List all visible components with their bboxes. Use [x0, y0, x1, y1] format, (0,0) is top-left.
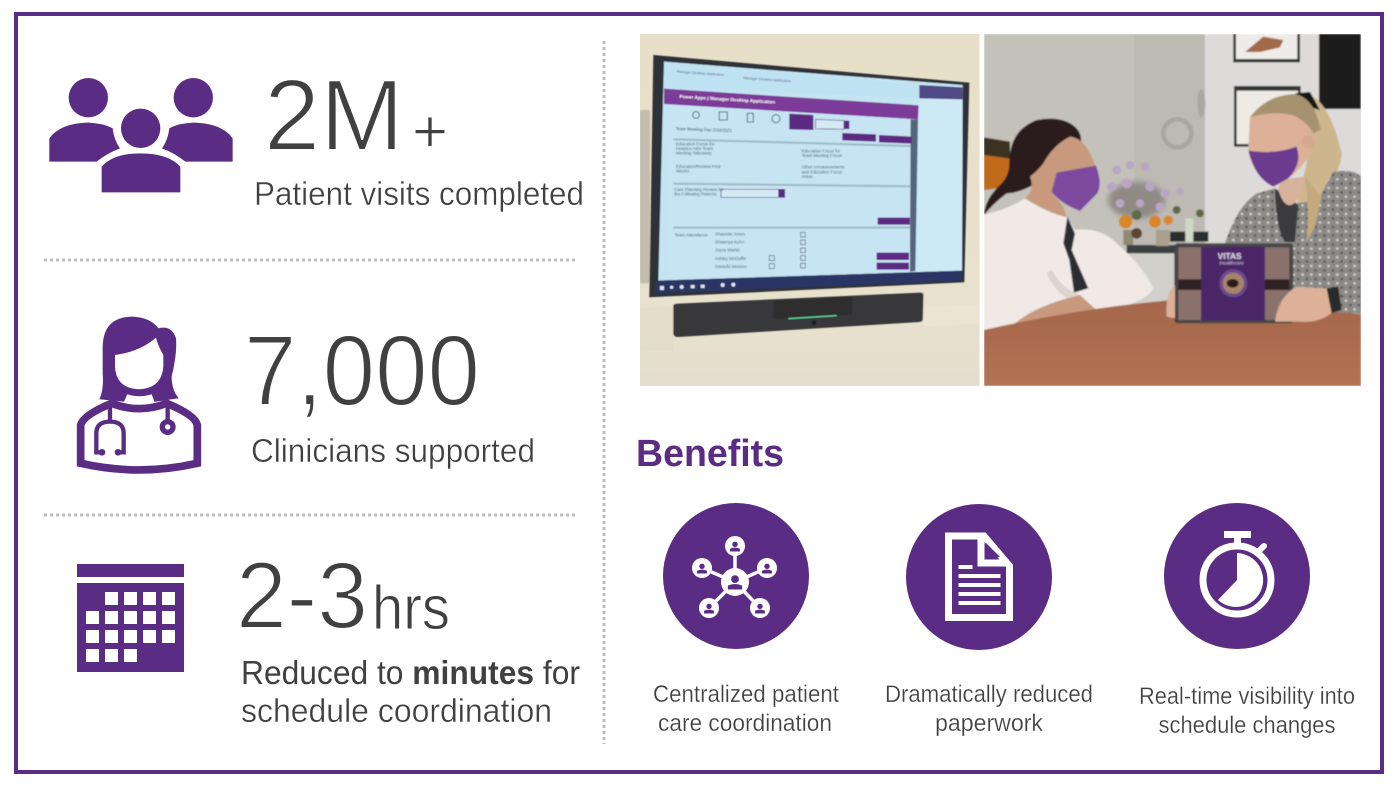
- monitor screen: [658, 62, 963, 281]
- right woman: head: [1248, 111, 1311, 187]
- nav icons: [693, 112, 780, 123]
- benefit: care coordination: [653, 503, 839, 737]
- photo: wall-mounted display showing the schedule app: Manager Desktop Application: [743, 76, 791, 83]
- horizontal dotted divider: [44, 258, 575, 262]
- picture frames: [1233, 34, 1300, 62]
- form labels: and Education Focus: [802, 169, 842, 174]
- caption: schedule changes: [1158, 712, 1336, 739]
- caption: paperwork: [935, 710, 1044, 737]
- form labels: Danielle Moreno: [715, 264, 747, 269]
- photo: wall-mounted display showing the schedule app: Power Apps | Manager Desktop Application: [679, 94, 775, 105]
- heading: Benefits: Benefits: [636, 433, 784, 475]
- action buttons: [842, 133, 876, 142]
- caption: Real-time visibility into: [1139, 683, 1355, 710]
- form labels: Shawnya Kuhn: [715, 239, 745, 244]
- stat: clinicians: [81, 315, 535, 470]
- form labels: Weeks: [676, 169, 689, 174]
- form labels: Team Meeting Day 2/10/2021: [675, 126, 733, 133]
- form labels: Ashley McDuffie: [715, 256, 747, 261]
- taskbar: [655, 271, 962, 293]
- left woman: ponytail and hair: [984, 119, 1081, 215]
- nav selected tile: [789, 114, 813, 130]
- icon: network of people: [663, 503, 809, 649]
- checkboxes: [769, 232, 805, 269]
- icon: clinician with stethoscope: [81, 317, 197, 470]
- form labels: Team Attendance: [674, 233, 708, 238]
- caption: Dramatically reduced: [885, 681, 1093, 708]
- form labels: Education Focus for: [676, 142, 715, 147]
- photo: wall-mounted display showing the schedule app: Manager Desktop Application: [677, 70, 724, 77]
- label: patient visits: Patient visits completed: [254, 175, 584, 212]
- form labels: Areas: [802, 174, 813, 179]
- form labels: Joyce Martin: [715, 248, 740, 253]
- label line two: schedule coordination: [241, 692, 552, 729]
- counter: [1126, 244, 1176, 254]
- app body: [668, 105, 914, 277]
- form labels: Care Planning Review for: [674, 187, 724, 192]
- left woman: mask: [1052, 166, 1100, 211]
- unit: hrs: hrs: [372, 574, 450, 643]
- horizontal dotted divider: [44, 514, 575, 516]
- right woman: blazer: [1225, 171, 1361, 313]
- form labels: Meeting Takeaway: [676, 151, 713, 156]
- number: 2M+: 2M: [264, 60, 404, 172]
- section rules: [673, 138, 911, 147]
- photo: wall-mounted display showing the schedule app: [640, 34, 980, 386]
- form labels: [674, 126, 845, 269]
- right woman: mask: [1248, 147, 1298, 187]
- stat: patient visits: [49, 60, 584, 212]
- caption: Centralized patient: [653, 681, 839, 708]
- plus sign: +: [412, 98, 448, 165]
- caption: care coordination: [658, 710, 832, 737]
- painting: [984, 137, 1010, 190]
- benefit: real-time visibility: [1139, 503, 1355, 739]
- form labels: Hospice Aide Team: [676, 146, 713, 151]
- stat: schedule coordination: [77, 543, 580, 729]
- vertical dotted divider: [602, 41, 606, 744]
- label line one: Reduced to minutes for: [241, 654, 580, 691]
- photo: two clinicians in masks at a table with a tablet: [984, 34, 1362, 386]
- side window: [917, 85, 963, 272]
- tablet with VITAS case: VITAS: [1218, 251, 1242, 261]
- left woman: forearm: [1015, 295, 1100, 323]
- icon: stopwatch: [1164, 503, 1310, 649]
- wall wreath: [1163, 119, 1191, 147]
- left woman: head and neck: [1025, 137, 1096, 220]
- form labels: Other Announcements: [802, 165, 845, 170]
- right woman: hand: [1275, 287, 1333, 322]
- label: clinicians: Clinicians supported: [251, 432, 535, 469]
- form labels: Shaunda Jones: [715, 232, 745, 237]
- benefit: reduced paperwork: [885, 504, 1093, 737]
- form labels: the Following Patients: [674, 192, 717, 197]
- form labels: Education/Review Prior: [676, 164, 722, 169]
- browser toolbar: [664, 60, 672, 62]
- number: 7,000: 7,000: [244, 315, 480, 427]
- right woman: blouse and neck: [1275, 188, 1298, 242]
- icon: calendar: [77, 564, 184, 672]
- soundbar: [673, 293, 923, 337]
- left woman: lab coat: [984, 198, 1153, 330]
- form labels: Education Focus for: [802, 148, 841, 153]
- right woman: hair: [1250, 94, 1321, 133]
- right woman: ponytail: [1297, 96, 1342, 204]
- flowers: [1107, 161, 1204, 239]
- icon: group of people: [49, 78, 233, 192]
- icon: document: [906, 504, 1052, 650]
- table top: [984, 301, 1361, 386]
- monitor bezel: [649, 55, 969, 297]
- dropdown: [721, 189, 785, 197]
- tablet with VITAS case: [1174, 243, 1293, 323]
- bottom buttons: [878, 218, 910, 225]
- number: 2-3: 2-3: [236, 543, 368, 649]
- tablet with VITAS case: Healthcare: [1220, 261, 1244, 267]
- app header bar: [664, 89, 919, 119]
- form labels: Team Meeting Focus: [802, 153, 842, 158]
